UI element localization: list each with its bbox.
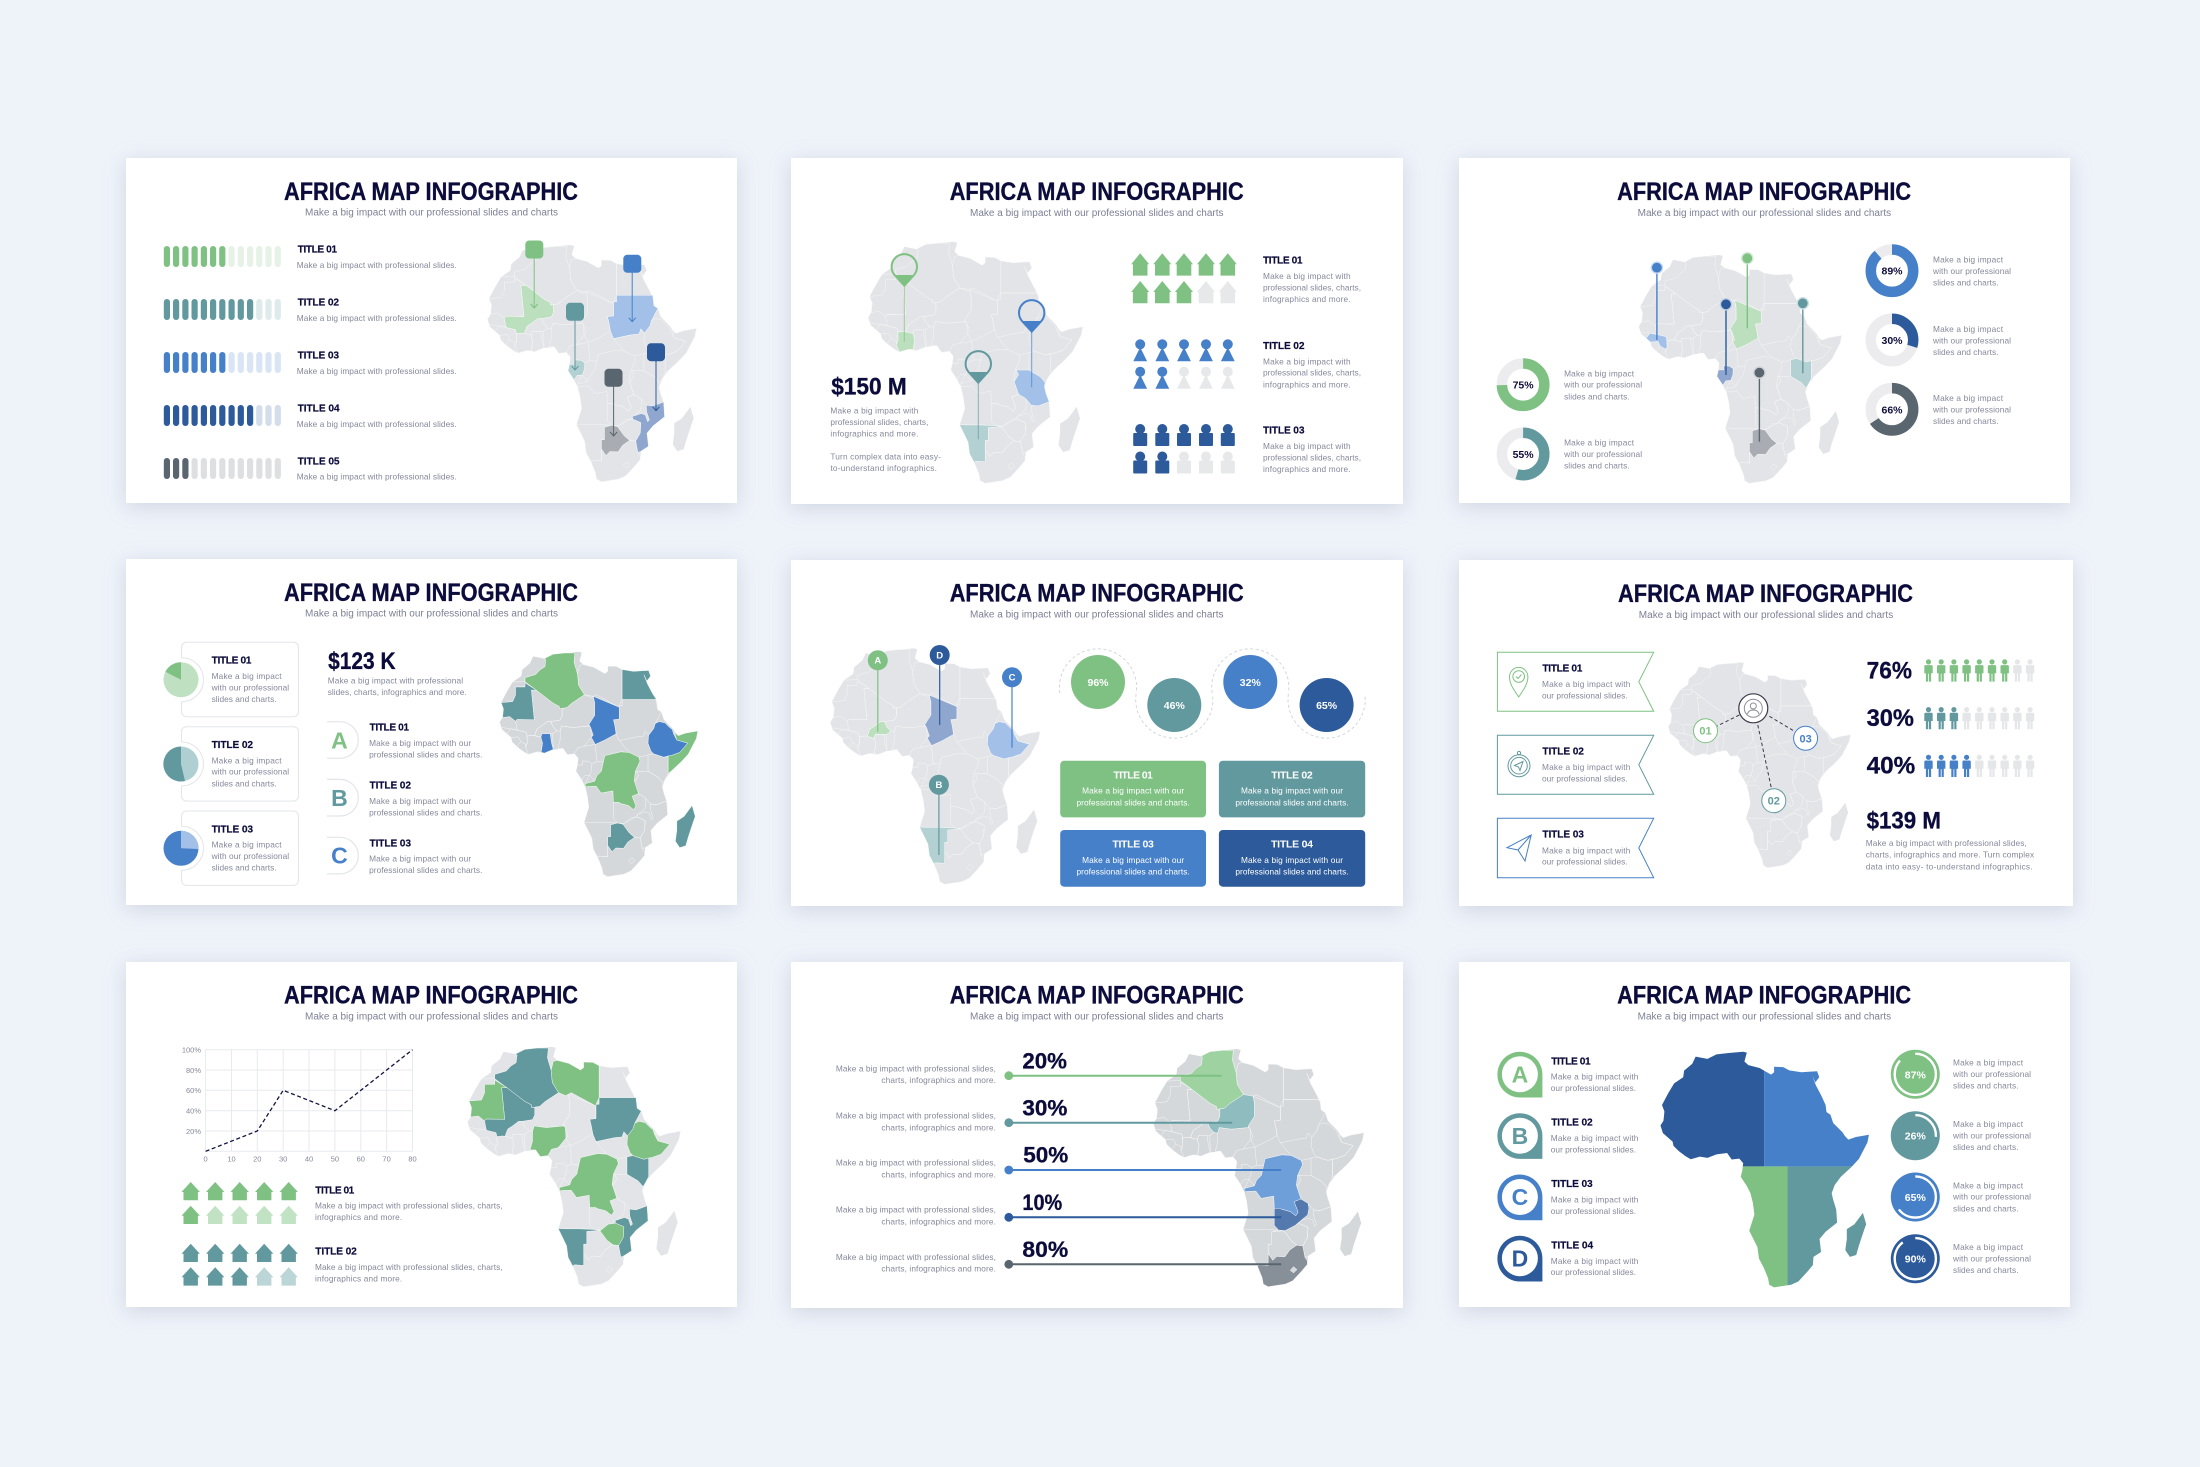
donut descriptions: slides and charts. (1933, 347, 1998, 357)
line chart (182, 1046, 417, 1164)
map: Africa (468, 1047, 681, 1287)
heading: AFRICA MAP INFOGRAPHIC (950, 580, 1244, 608)
text blocks (1263, 256, 1361, 474)
donut: 30%: 30% (1881, 335, 1903, 347)
card 3 with pie: TITLE 03 (212, 824, 253, 835)
donut descriptions (1563, 255, 2011, 471)
gauge descriptions: Make a big impact (1953, 1058, 2024, 1068)
card title 01: professional slides and charts. (1076, 797, 1190, 807)
gauge descriptions (1952, 1058, 2031, 1275)
heading (950, 178, 1244, 219)
gauge descriptions: slides and charts. (1953, 1265, 2018, 1275)
bubble 65%: 65% (1316, 700, 1338, 712)
heading: AFRICA MAP INFOGRAPHIC (284, 982, 578, 1010)
panel: bars and map markers (126, 158, 737, 503)
map pin D (930, 645, 950, 725)
banner 2: TITLE 02 (1542, 747, 1584, 758)
card title 04 (1219, 830, 1365, 887)
card 3 with pie: with our professional (211, 851, 289, 861)
line chart: 40 (305, 1155, 313, 1164)
card 2 with pie: slides and charts. (212, 778, 277, 788)
donut descriptions: slides and charts. (1564, 391, 1630, 401)
bubble 96% (1071, 655, 1125, 709)
people row 76%: 76% (1867, 658, 1912, 685)
letter item B: B (331, 785, 348, 811)
bubble 46%: 46% (1164, 700, 1185, 712)
donut: 89%: 89% (1881, 266, 1903, 278)
donut descriptions: slides and charts. (1564, 461, 1630, 471)
map pin D: D (936, 650, 943, 661)
gauge 87%: 87% (1905, 1069, 1926, 1081)
donut descriptions: with our professional (1932, 404, 2011, 414)
donut: 30% (1871, 319, 1913, 361)
heading: Make a big impact with our professional slides and charts (305, 1012, 558, 1023)
card 3 with pie (159, 811, 298, 885)
line 80%: charts, infographics and more. (881, 1263, 996, 1273)
letter item B (327, 779, 482, 817)
text rows: TITLE 02 (298, 298, 339, 308)
donut: 89% (1871, 249, 1913, 292)
text blocks: infographics and more. (1263, 464, 1351, 474)
text blocks: infographics and more. (1263, 294, 1351, 304)
panel: pies and letters (126, 559, 737, 905)
connector lines (1717, 715, 1794, 788)
gauge 87% (1891, 1050, 1940, 1099)
map: Africa (830, 648, 1040, 884)
text blocks: TITLE 01 (315, 1185, 355, 1196)
gauge 65% (1891, 1172, 1940, 1222)
donut descriptions: with our professional (1932, 335, 2011, 345)
line chart: 60 (357, 1155, 365, 1164)
card title 01: Make a big impact with our (1082, 786, 1184, 796)
badge B: TITLE 02 (1551, 1118, 1593, 1129)
map: Africa with highlighted countries (488, 245, 696, 482)
stat: $139 M: Make a big impact with professional slides, (1866, 838, 2027, 848)
heading: Make a big impact with our professional slides and charts (970, 208, 1224, 219)
line 20% (836, 1048, 1222, 1085)
line 30% (836, 1096, 1232, 1132)
panel: percent bubbles and colored cards (791, 560, 1403, 906)
people row 40% (1867, 753, 2034, 780)
gauge descriptions: with our professional (1952, 1069, 2031, 1079)
donut: 55% (1502, 433, 1544, 475)
letter item A: A (331, 727, 348, 753)
donut: 75% (1502, 363, 1544, 406)
banner 1 (1497, 652, 1654, 711)
card 1 with pie: TITLE 01 (212, 656, 252, 667)
heading (950, 580, 1244, 621)
banner 2: our professional slides. (1542, 774, 1628, 784)
stat: $139 M: data into easy- to-understand infographics. (1866, 861, 2032, 871)
map pins (892, 254, 1044, 439)
node 02: 02 (1768, 796, 1780, 808)
card 1 with pie: Make a big impact (212, 671, 282, 681)
card title 01: TITLE 01 (1113, 769, 1153, 781)
donut: 55%: 55% (1513, 449, 1534, 461)
text rows: Make a big impact with professional slides. (297, 419, 457, 429)
donut descriptions: slides and charts. (1933, 278, 1998, 288)
people row 30%: 30% (1867, 705, 1914, 732)
stat: $123 K: Make a big impact with professional (328, 675, 463, 685)
heading (284, 982, 578, 1023)
node 03: 03 (1799, 733, 1812, 745)
panel: banners and people stats (1459, 560, 2073, 906)
line chart: 70 (382, 1155, 391, 1164)
panel: line chart and arrows (126, 962, 737, 1307)
gauge descriptions: with our professional (1952, 1192, 2031, 1202)
heading: AFRICA MAP INFOGRAPHIC (284, 178, 578, 206)
heading: Make a big impact with our professional slides and charts (970, 610, 1224, 621)
line chart: 20% (186, 1127, 201, 1136)
line 30%: 30% (1022, 1096, 1067, 1121)
text blocks: infographics and more. (315, 1212, 402, 1222)
donut: 66%: 66% (1881, 404, 1903, 416)
heading: Make a big impact with our professional slides and charts (970, 1012, 1224, 1023)
letter item A (327, 722, 482, 759)
card 1 with pie (159, 642, 298, 717)
banner 2 (1497, 735, 1654, 794)
text blocks (315, 1185, 503, 1284)
line 30%: charts, infographics and more. (881, 1122, 996, 1132)
card title 04: professional slides and charts. (1235, 866, 1349, 876)
stat: $150 M: infographics and more. (830, 429, 918, 439)
letter item C: Make a big impact with our (369, 854, 471, 864)
icon: paper plane (1507, 835, 1531, 861)
progress bars row 1 (164, 246, 281, 267)
node 01: 01 (1699, 726, 1712, 738)
banner 1: Make a big impact with (1542, 679, 1631, 689)
icon: compass (1508, 751, 1530, 777)
card title 03: Make a big impact with our (1082, 855, 1184, 865)
panel: percentage lines (791, 962, 1403, 1308)
text rows: TITLE 04 (298, 404, 340, 415)
donut descriptions: Make a big impact (1564, 438, 1635, 448)
line chart: 80 (408, 1155, 417, 1164)
progress bars row 3 (164, 352, 281, 373)
text blocks: infographics and more. (1263, 379, 1351, 389)
card 2 with pie: Make a big impact (212, 755, 282, 765)
line 20%: Make a big impact with professional slides, (836, 1063, 996, 1073)
line chart: 40% (186, 1106, 201, 1115)
pictogram: arrows (1131, 253, 1237, 303)
map pin A: A (874, 656, 881, 667)
stat: $150 M: to-understand infographics. (830, 463, 937, 473)
gauge 90%: 90% (1905, 1254, 1926, 1266)
text rows: TITLE 01 (298, 245, 337, 256)
badge B: Make a big impact with (1551, 1133, 1639, 1143)
line chart: 60% (186, 1086, 201, 1095)
progress bars row 2 (164, 299, 281, 320)
text rows: TITLE 03 (298, 350, 339, 362)
donut descriptions: Make a big impact (1933, 324, 2004, 334)
text blocks: Make a big impact with professional slides, charts, (315, 1200, 503, 1210)
map: Africa (500, 652, 698, 877)
map pin C (1002, 667, 1022, 748)
gauge descriptions: slides and charts. (1953, 1142, 2018, 1152)
heading: AFRICA MAP INFOGRAPHIC (1617, 178, 1911, 206)
letter item A: TITLE 01 (370, 722, 409, 733)
text rows (297, 245, 457, 482)
badge D (1497, 1236, 1639, 1282)
badge C: our professional slides. (1551, 1206, 1636, 1216)
line 50%: 50% (1023, 1143, 1068, 1168)
map pin B: B (935, 780, 942, 791)
letter item C: TITLE 03 (370, 838, 411, 849)
bubble 65% (1300, 678, 1354, 732)
card title 02: Make a big impact with our (1241, 786, 1343, 796)
map: Africa (1639, 255, 1842, 483)
heading: AFRICA MAP INFOGRAPHIC (1618, 580, 1913, 608)
badge A: TITLE 01 (1551, 1056, 1591, 1067)
text blocks: Make a big impact with (1263, 271, 1351, 281)
heading (1617, 982, 1911, 1023)
gauge descriptions: with our professional (1952, 1130, 2031, 1140)
gauge descriptions: Make a big impact (1953, 1180, 2024, 1190)
card 1 with pie: with our professional (211, 682, 289, 692)
icon: location pin (1510, 667, 1528, 697)
gauge descriptions: slides and charts. (1953, 1081, 2018, 1091)
letter item C: C (331, 843, 348, 869)
badge D: D (1512, 1246, 1528, 1272)
donut: 66% (1871, 388, 1913, 430)
panel: donuts (1459, 158, 2070, 503)
text blocks: TITLE 02 (315, 1247, 357, 1258)
map: Africa (1668, 662, 1851, 868)
people row 30% (1867, 705, 2034, 732)
heading (1617, 178, 1911, 219)
line 10% (836, 1190, 1281, 1226)
panel: pins and pictograms (791, 158, 1403, 504)
line 80%: Make a big impact with professional slides, (836, 1252, 996, 1262)
gauge 65%: 65% (1905, 1192, 1926, 1204)
stat: $123 K: $123 K (328, 648, 396, 675)
card title 02: TITLE 02 (1271, 769, 1313, 781)
heading: Make a big impact with our professional slides and charts (1638, 1012, 1891, 1023)
stat: $139 M (1866, 808, 2035, 871)
stat: $139 M: $139 M (1867, 808, 1941, 835)
badge C (1497, 1174, 1639, 1220)
donut descriptions: with our professional (1563, 380, 1642, 390)
progress bars row 5 (164, 458, 281, 479)
stat: $150 M: professional slides, charts, (830, 417, 928, 427)
map: Africa in four quadrants (1660, 1052, 1869, 1288)
gauge descriptions: Make a big impact (1953, 1119, 2024, 1129)
line 10%: Make a big impact with professional slides, (836, 1205, 996, 1215)
text rows: Make a big impact with professional slides. (297, 313, 457, 323)
dashed arcs (1059, 649, 1365, 738)
text blocks: TITLE 03 (1263, 426, 1305, 437)
heading (284, 579, 578, 620)
text blocks: Make a big impact with professional slides, charts, (315, 1262, 503, 1272)
banner 1: our professional slides. (1542, 691, 1628, 701)
text blocks: professional slides, charts, (1263, 368, 1361, 378)
stat: $123 K: slides, charts, infographics and more. (328, 687, 467, 697)
stat: $150 M (830, 373, 941, 473)
donut descriptions: slides and charts. (1933, 416, 1998, 426)
bubble 46% (1147, 678, 1201, 732)
letter item B: professional slides and charts. (369, 807, 482, 817)
stat: $150 M: Turn complex data into easy- (830, 452, 941, 462)
heading: Make a big impact with our professional slides and charts (305, 609, 558, 620)
line 10%: charts, infographics and more. (881, 1216, 996, 1226)
badge A: Make a big impact with (1551, 1072, 1639, 1082)
gauge descriptions: Make a big impact (1953, 1242, 2024, 1252)
letter item A: professional slides and charts. (369, 749, 482, 759)
people row 40%: 40% (1867, 753, 1915, 780)
line chart: 50 (331, 1155, 339, 1164)
people row 76% (1867, 658, 2034, 685)
line chart: 0 (204, 1155, 208, 1164)
donut descriptions: Make a big impact (1933, 393, 2004, 403)
card 2 with pie (159, 727, 298, 801)
card 2 with pie: TITLE 02 (212, 740, 253, 751)
line chart: 100% (182, 1046, 201, 1054)
gauge descriptions: slides and charts. (1953, 1203, 2018, 1213)
text rows: Make a big impact with professional slides. (297, 260, 457, 270)
line chart: 10 (227, 1155, 236, 1164)
map: Africa (1153, 1049, 1364, 1287)
card title 04: TITLE 04 (1271, 839, 1313, 851)
line 50% (836, 1143, 1281, 1179)
badge C: TITLE 03 (1551, 1179, 1593, 1190)
text blocks: professional slides, charts, (1263, 282, 1361, 292)
heading: AFRICA MAP INFOGRAPHIC (950, 178, 1244, 206)
badge C: C (1512, 1184, 1528, 1210)
bubble 96%: 96% (1087, 677, 1109, 689)
badge B: B (1512, 1123, 1528, 1149)
heading: Make a big impact with our professional slides and charts (1639, 610, 1893, 621)
line 20%: 20% (1022, 1048, 1067, 1073)
donut descriptions: Make a big impact (1564, 368, 1635, 378)
letter item B: TITLE 02 (370, 780, 411, 791)
line 80% (836, 1237, 1281, 1273)
badge B (1497, 1113, 1639, 1159)
pictogram: green arrows (182, 1182, 298, 1224)
text blocks: Make a big impact with (1263, 356, 1351, 366)
panel: quadrant map (1459, 962, 2070, 1307)
line chart: 30 (279, 1155, 287, 1164)
card title 03: professional slides and charts. (1076, 866, 1190, 876)
line chart: 80% (186, 1066, 201, 1075)
banner 1: TITLE 01 (1542, 663, 1583, 674)
letter item B: Make a big impact with our (369, 796, 471, 806)
text rows: Make a big impact with professional slides. (297, 366, 457, 376)
map pins (1651, 253, 1808, 442)
text blocks: Make a big impact with (1263, 441, 1351, 451)
banner 3 (1497, 818, 1654, 878)
line 50%: charts, infographics and more. (881, 1169, 996, 1179)
stat: $150 M: Make a big impact with (830, 405, 919, 415)
badge B: our professional slides. (1551, 1144, 1636, 1154)
text blocks: professional slides, charts, (1263, 452, 1361, 462)
bubble 32% (1223, 655, 1277, 709)
stat: $150 M: $150 M (831, 373, 907, 400)
node 03 (1794, 726, 1818, 750)
heading (1618, 580, 1913, 621)
heading: Make a big impact with our professional slides and charts (305, 208, 558, 219)
banner 3: our professional slides. (1542, 857, 1628, 867)
heading (284, 178, 578, 219)
card title 03: TITLE 03 (1112, 839, 1154, 851)
gauge 26%: 26% (1905, 1131, 1926, 1143)
bubble 32%: 32% (1240, 677, 1261, 689)
heading (950, 982, 1244, 1023)
map pin A (868, 650, 888, 732)
heading: AFRICA MAP INFOGRAPHIC (1617, 982, 1911, 1010)
banner 2: Make a big impact with (1542, 762, 1631, 772)
card 2 with pie: with our professional (211, 767, 289, 777)
text rows: Make a big impact with professional slides. (297, 472, 457, 482)
map markers with arrows (526, 241, 664, 436)
heading: Make a big impact with our professional slides and charts (1638, 208, 1891, 219)
card title 04: Make a big impact with our (1241, 855, 1343, 865)
heading: AFRICA MAP INFOGRAPHIC (950, 982, 1244, 1010)
line 80%: 80% (1022, 1237, 1068, 1262)
line 20%: charts, infographics and more. (881, 1075, 996, 1085)
donut descriptions: with our professional (1563, 449, 1642, 459)
node 01 (1694, 719, 1718, 743)
badge A (1497, 1052, 1639, 1098)
map pin C: C (1009, 673, 1016, 684)
progress bars row 4 (164, 405, 281, 426)
badge D: our professional slides. (1551, 1267, 1636, 1277)
badge A: our professional slides. (1551, 1083, 1636, 1093)
stat: $139 M: charts, infographics and more. Turn complex (1866, 850, 2035, 860)
badge D: Make a big impact with (1551, 1256, 1639, 1266)
heading: AFRICA MAP INFOGRAPHIC (284, 579, 578, 607)
card title 02: professional slides and charts. (1235, 797, 1349, 807)
line 10%: 10% (1022, 1190, 1062, 1215)
hub icon: person (1739, 694, 1768, 723)
badge A: A (1512, 1062, 1528, 1088)
map: Africa (868, 242, 1083, 483)
card 1 with pie: slides and charts. (212, 694, 277, 704)
gauge 26% (1891, 1111, 1940, 1160)
line chart: 20 (253, 1155, 261, 1164)
text blocks: TITLE 01 (1263, 256, 1303, 267)
node 02 (1762, 789, 1786, 813)
text blocks: TITLE 02 (1263, 341, 1305, 352)
card title 03 (1060, 830, 1206, 887)
stat: $123 K (328, 648, 467, 697)
pictogram: teal arrows (182, 1244, 298, 1286)
text rows: TITLE 05 (298, 456, 340, 467)
banner 3: TITLE 03 (1542, 830, 1584, 841)
badge D: TITLE 04 (1551, 1240, 1594, 1251)
donut: 75%: 75% (1513, 380, 1534, 392)
card title 01 (1060, 761, 1206, 817)
donut descriptions: Make a big impact (1933, 255, 2004, 265)
donut descriptions: with our professional (1932, 266, 2011, 276)
line 50%: Make a big impact with professional slides, (836, 1158, 996, 1168)
pictogram: triangle figures (1133, 339, 1235, 389)
card title 02 (1219, 761, 1365, 817)
gauge 90% (1891, 1234, 1940, 1283)
map pin B (929, 775, 949, 855)
banner 3: Make a big impact with (1542, 845, 1631, 855)
letter item A: Make a big impact with our (369, 738, 471, 748)
card 3 with pie: Make a big impact (212, 840, 282, 850)
pictogram: block figures (1133, 424, 1235, 474)
text blocks: infographics and more. (315, 1274, 402, 1284)
gauge descriptions: with our professional (1952, 1253, 2031, 1263)
card 3 with pie: slides and charts. (212, 863, 277, 873)
badge C: Make a big impact with (1551, 1194, 1639, 1204)
letter item C (327, 837, 482, 875)
letter item C: professional slides and charts. (369, 865, 482, 875)
line 30%: Make a big impact with professional slides, (836, 1111, 996, 1121)
